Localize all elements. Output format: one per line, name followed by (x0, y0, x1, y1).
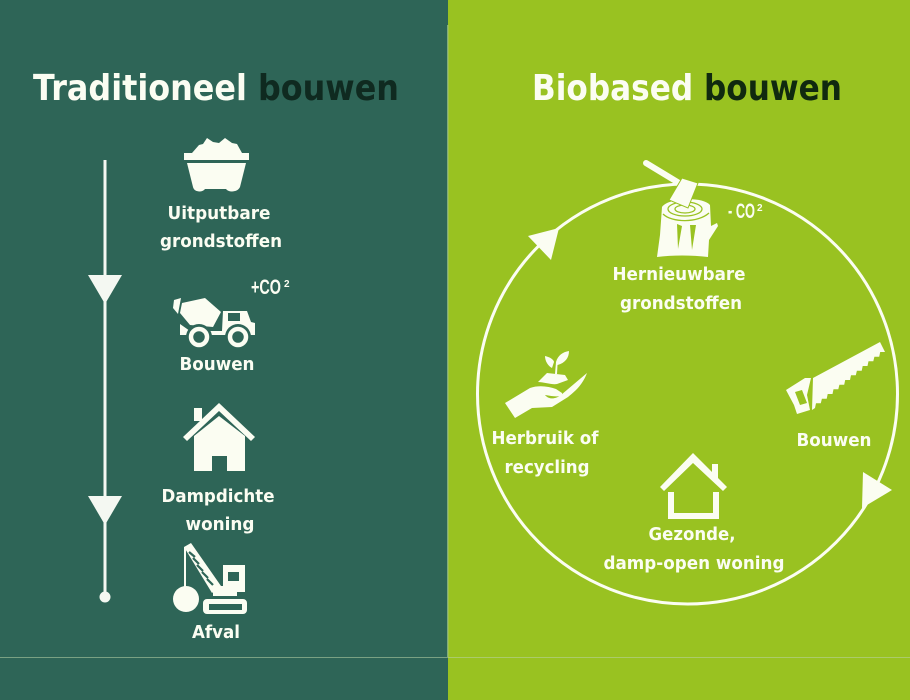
label: afval: Afval (192, 622, 240, 643)
label: gezonde damp-open woning (604, 524, 784, 574)
label: minus co2: - CO (728, 200, 755, 223)
label: hernieuwbare grondstoffen: Hernieuwbare (612, 264, 746, 285)
label: herbruik of recycling: recycling (504, 457, 590, 478)
cycle circle with arrows (478, 184, 898, 604)
label: herbruik of recycling: Herbruik of (492, 428, 599, 449)
icon: hand holding seedling (505, 351, 587, 418)
panel: biobased background (448, 0, 910, 700)
icon: cement mixer truck (173, 298, 255, 350)
label: uitputbare grondstoffen (160, 203, 282, 252)
label: uitputbare grondstoffen: Uitputbare (168, 203, 270, 224)
label: plus co2: 2 (284, 279, 290, 290)
label: gezonde damp-open woning: Gezonde, (648, 524, 736, 545)
label: dampdichte woning: Dampdichte (162, 486, 274, 507)
label: dampdichte woning: woning (186, 514, 254, 535)
icon: hand saw (786, 342, 885, 414)
label: herbruik of recycling (492, 428, 599, 478)
label: plus co2: +CO (251, 276, 281, 299)
flow arrow: traditional linear path (88, 160, 122, 602)
title: biobased bouwen: Biobased bouwen (532, 68, 842, 109)
label: gezonde damp-open woning: damp-open woning (604, 553, 784, 574)
label: bouwen right: Bouwen (796, 430, 872, 451)
icon: closed house (183, 403, 255, 471)
label: dampdichte woning (162, 486, 274, 535)
icon: axe and tree stump (646, 163, 718, 257)
label: uitputbare grondstoffen: grondstoffen (160, 231, 282, 252)
label: hernieuwbare grondstoffen: grondstoffen (620, 293, 742, 314)
title: traditioneel bouwen: Traditioneel bouwen (33, 68, 399, 109)
panel: traditioneel background (0, 0, 448, 700)
icon: open house (660, 453, 727, 519)
icon: wrecking crane (173, 543, 247, 614)
label: minus co2: 2 (757, 203, 763, 214)
icon: mine cart (184, 138, 249, 191)
label: hernieuwbare grondstoffen (612, 264, 746, 314)
label: bouwen left: Bouwen (180, 354, 254, 375)
